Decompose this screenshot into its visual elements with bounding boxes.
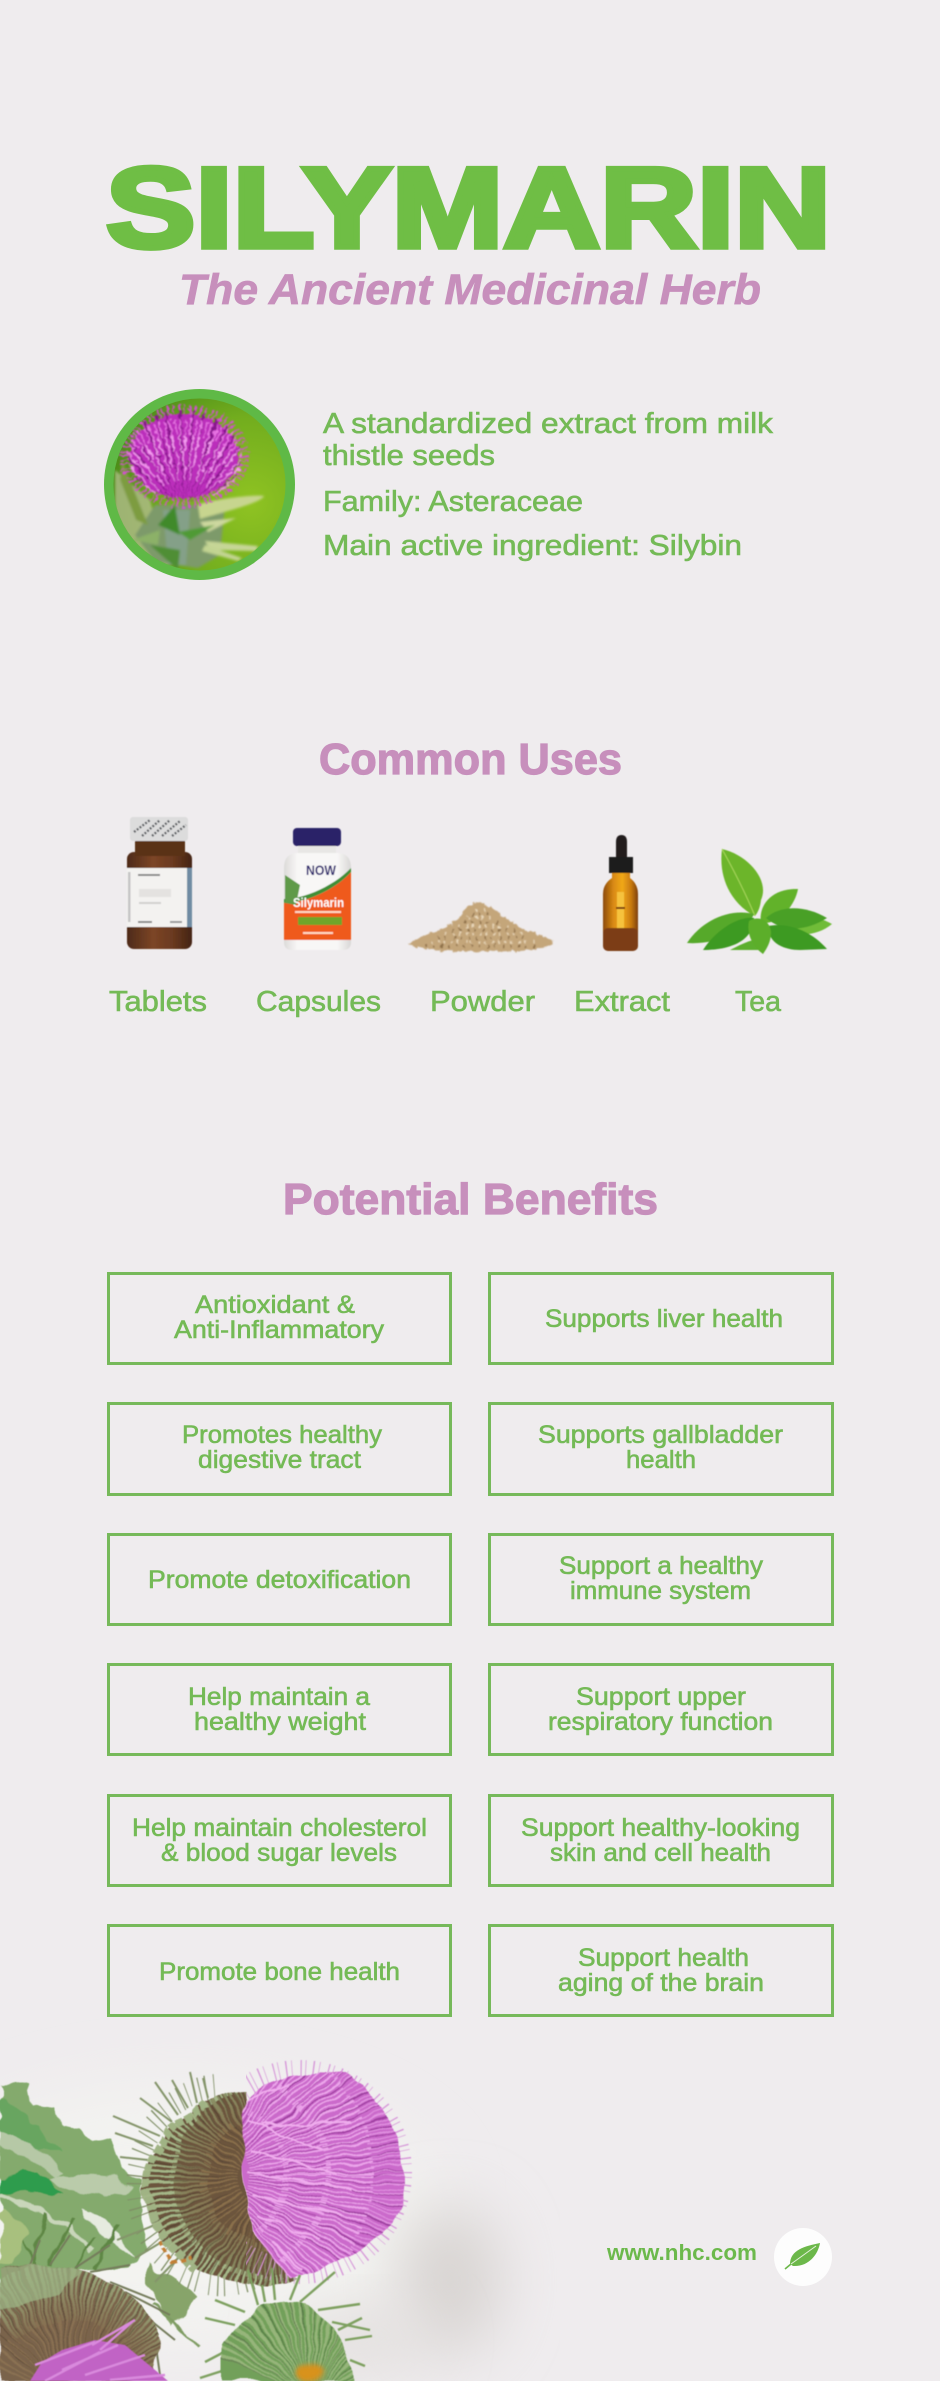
benefit box: brain [490, 1926, 832, 2016]
icon: leaf logo [774, 2228, 832, 2286]
icon: capsules bottle: NOW [306, 862, 337, 878]
benefit box: immune [490, 1534, 832, 1624]
left leaves [0, 2084, 200, 2350]
benefit box: gallbladder: Supports gallbladder [538, 1421, 783, 1449]
benefit box: bone: Promote bone health [159, 1958, 400, 1986]
bottom pink flower [30, 2320, 168, 2381]
benefit box: antioxidant: Anti-Inflammatory [174, 1316, 385, 1344]
label: powder: Powder [430, 986, 535, 1018]
photo: milk thistle flower in green ring [104, 389, 295, 580]
label: capsules: Capsules [256, 986, 381, 1018]
intro text [323, 408, 774, 562]
benefit box: brain: Support health [578, 1944, 749, 1972]
subtitle: The Ancient Medicinal Herb [179, 266, 761, 314]
benefit box: immune: Support a healthy [559, 1552, 764, 1580]
main bud [112, 2071, 298, 2297]
benefit box: respiratory [490, 1664, 832, 1754]
intro text: Family: Asteraceae [323, 486, 583, 518]
benefit box: gallbladder: health [626, 1446, 696, 1474]
title: SILYMARIN [106, 145, 831, 272]
label: tablets: Tablets [109, 986, 207, 1018]
benefit box: detoxification: Promote detoxification [148, 1566, 411, 1594]
benefit box: skin: Support healthy-looking [521, 1814, 800, 1842]
hair tips [200, 2072, 400, 2272]
benefit box: respiratory: Support upper [576, 1683, 746, 1711]
benefit box: bone [108, 1926, 450, 2016]
benefit box: liver: Supports liver health [545, 1305, 783, 1333]
benefit box: skin: skin and cell health [550, 1839, 771, 1867]
benefit box: weight: healthy weight [194, 1708, 366, 1736]
benefit box: digestive: Promotes healthy [182, 1421, 383, 1449]
label: tea: Tea [735, 986, 782, 1018]
website url: www.nhc.com [606, 2240, 757, 2265]
flower head [240, 2070, 406, 2279]
bottom-left bud [0, 2235, 179, 2381]
benefit box: antioxidant [108, 1274, 450, 1364]
intro text: thistle seeds [323, 440, 495, 472]
heading: common uses: Common Uses [319, 735, 622, 784]
icon: powder pile [408, 903, 554, 952]
icon: tablets bottle [127, 817, 192, 949]
benefit box: digestive [108, 1404, 450, 1494]
panel: potential benefits [108, 1274, 832, 2016]
bud spines [112, 2071, 256, 2297]
intro text: A standardized extract from milk [323, 408, 774, 440]
icon: capsules bottle [284, 828, 351, 950]
benefit box: cholesterol: & blood sugar levels [161, 1839, 397, 1867]
benefit box: skin [490, 1796, 832, 1886]
benefit box: respiratory: respiratory function [548, 1708, 773, 1736]
benefit box: antioxidant: Antioxidant & [195, 1291, 355, 1319]
main pink flower [240, 2060, 412, 2284]
heading: potential benefits: Potential Benefits [283, 1175, 658, 1224]
bud body [140, 2091, 298, 2288]
label: extract: Extract [574, 986, 670, 1018]
benefit box: gallbladder [490, 1404, 832, 1494]
bottom-centre bud [200, 2268, 372, 2381]
panel: common uses [109, 817, 832, 1018]
benefit box: brain: aging of the brain [558, 1969, 764, 1997]
icon: extract dropper bottle [603, 835, 638, 951]
benefit box: digestive: digestive tract [198, 1446, 361, 1474]
panel: intro [104, 389, 774, 580]
intro text: Main active ingredient: Silybin [323, 530, 742, 562]
benefit box: detoxification [108, 1534, 450, 1624]
benefit box: immune: immune system [570, 1577, 751, 1605]
benefit box: cholesterol [108, 1796, 450, 1886]
benefit box: weight: Help maintain a [188, 1683, 370, 1711]
illustration: thistle flowers [0, 2060, 513, 2381]
icon: tea leaves [687, 849, 832, 954]
benefit box: weight [108, 1664, 450, 1754]
benefit box: liver [490, 1274, 832, 1364]
benefit box: cholesterol: Help maintain cholesterol [132, 1814, 427, 1842]
icon: capsules bottle: Silymarin [293, 895, 344, 910]
